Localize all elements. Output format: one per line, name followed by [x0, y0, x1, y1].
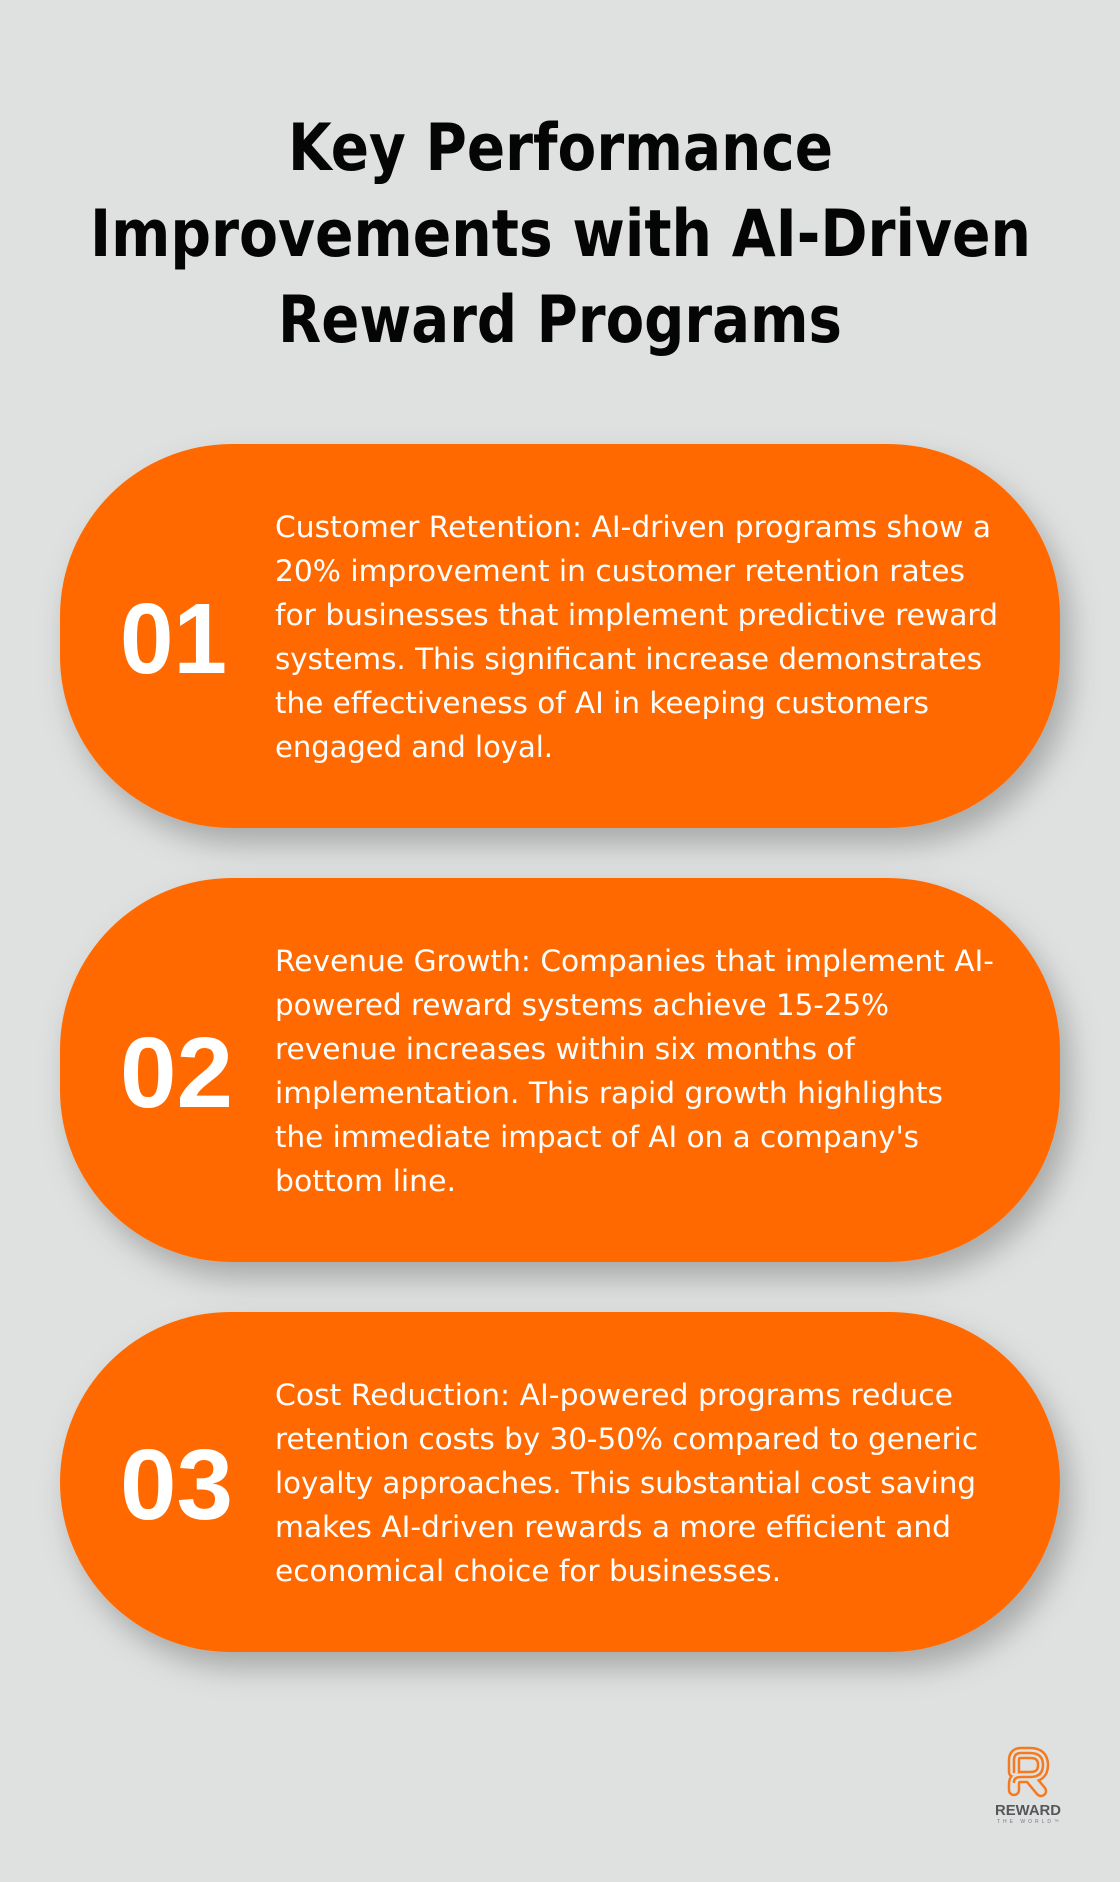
- logo: Reward the World: [995, 1753, 1061, 1825]
- body text: loyalty approaches. This substantial cost saving: [275, 1466, 976, 1500]
- body text: engaged and loyal.: [275, 730, 553, 764]
- panel background: [60, 1312, 1060, 1652]
- step number 01: 01: [120, 583, 227, 695]
- body text: implementation. This rapid growth highlights: [275, 1076, 943, 1110]
- body text: powered reward systems achieve 15-25%: [275, 988, 889, 1022]
- body text: economical choice for businesses.: [275, 1554, 781, 1588]
- step number 02: 02: [120, 1017, 233, 1129]
- title: Key Performance: [288, 111, 833, 186]
- body text: [275, 944, 994, 1198]
- body text: Revenue Growth: Companies that implement AI-: [275, 944, 994, 978]
- icon: R mark: [1014, 1753, 1043, 1791]
- body text: systems. This significant increase demonstrates: [275, 642, 982, 676]
- panel: revenue growth: [60, 878, 1060, 1262]
- wordmark: REWARD: [995, 1803, 1061, 1819]
- body text: 20% improvement in customer retention rates: [275, 554, 965, 588]
- body text: retention costs by 30-50% compared to generic: [275, 1422, 978, 1456]
- panel background: [60, 444, 1060, 828]
- body text: Customer Retention: AI-driven programs show a: [275, 510, 991, 544]
- body text: the immediate impact of AI on a company's: [275, 1120, 919, 1154]
- panel: customer retention: [60, 444, 1060, 828]
- body text: the effectiveness of AI in keeping customers: [275, 686, 929, 720]
- body text: [275, 510, 998, 764]
- body text: Cost Reduction: AI-powered programs reduce: [275, 1378, 953, 1412]
- body text: makes AI-driven rewards a more efficient and: [275, 1510, 951, 1544]
- title: Reward Programs: [278, 283, 842, 358]
- body text: for businesses that implement predictive reward: [275, 598, 998, 632]
- panel background: [60, 878, 1060, 1262]
- body text: bottom line.: [275, 1164, 456, 1198]
- body text: [275, 1378, 978, 1588]
- tagline: THE WORLD™: [997, 1819, 1059, 1825]
- step number 03: 03: [120, 1429, 233, 1541]
- body text: revenue increases within six months of: [275, 1032, 856, 1066]
- title: [90, 111, 1031, 358]
- panel: cost reduction: [60, 1312, 1060, 1652]
